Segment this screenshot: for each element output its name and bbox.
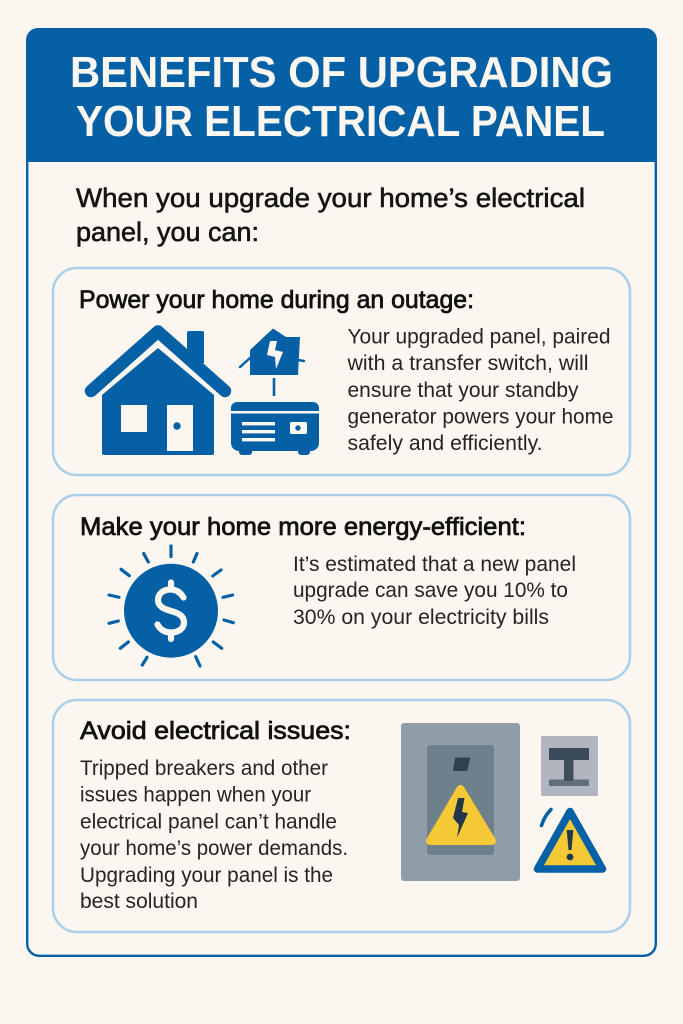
body text: issues: your home’s power demands. bbox=[80, 837, 348, 860]
icon: dollar sun bbox=[109, 546, 233, 666]
body text: energy: 30% on your electricity bills bbox=[293, 606, 549, 629]
body text: outage: with a transfer switch, will bbox=[346, 352, 588, 375]
body text: outage: Your upgraded panel, paired bbox=[348, 326, 610, 348]
body text: issues bbox=[80, 757, 348, 913]
panel frame: outage bbox=[53, 268, 630, 475]
heading: outage: Power your home during an outage: bbox=[79, 286, 474, 314]
body text: outage: ensure that your standby bbox=[348, 379, 579, 402]
heading: issues: Avoid electrical issues: bbox=[80, 717, 351, 745]
body text: outage: generator powers your home bbox=[348, 406, 614, 428]
intro text: When you upgrade your home’s electrical bbox=[76, 183, 585, 213]
title: YOUR ELECTRICAL PANEL bbox=[76, 97, 605, 146]
body text: outage: safely and efficiently. bbox=[348, 432, 542, 455]
title bbox=[70, 48, 613, 146]
intro text: panel, you can: bbox=[76, 217, 259, 247]
panel: energy bbox=[53, 495, 630, 680]
heading: energy: Make your home more energy-efficient: bbox=[80, 513, 526, 541]
body text: energy bbox=[293, 553, 576, 629]
panel frame: energy bbox=[53, 495, 630, 680]
body text: issues: electrical panel can’t handle bbox=[80, 810, 337, 834]
panel frame: issues bbox=[53, 700, 630, 932]
panel: outage bbox=[53, 268, 630, 475]
title: BENEFITS OF UPGRADING bbox=[70, 48, 613, 97]
icon: house bbox=[91, 331, 225, 455]
intro text bbox=[76, 183, 585, 247]
body text: outage bbox=[346, 326, 614, 455]
body text: issues: best solution bbox=[80, 890, 198, 913]
body text: energy: upgrade can save you 10% to bbox=[293, 579, 568, 602]
icon: small house with bolt bbox=[240, 328, 304, 396]
icon: breaker switch bbox=[541, 736, 598, 796]
icon: warning triangle bbox=[538, 810, 602, 869]
icon: generator bbox=[231, 402, 319, 455]
body text: energy: It’s estimated that a new panel bbox=[293, 553, 576, 576]
icon: electrical panel with warning bbox=[401, 723, 520, 881]
body text: issues: Upgrading your panel is the bbox=[80, 864, 333, 887]
body text: issues: issues happen when your bbox=[80, 784, 311, 807]
panel: issues bbox=[53, 700, 630, 932]
body text: issues: Tripped breakers and other bbox=[80, 757, 328, 780]
